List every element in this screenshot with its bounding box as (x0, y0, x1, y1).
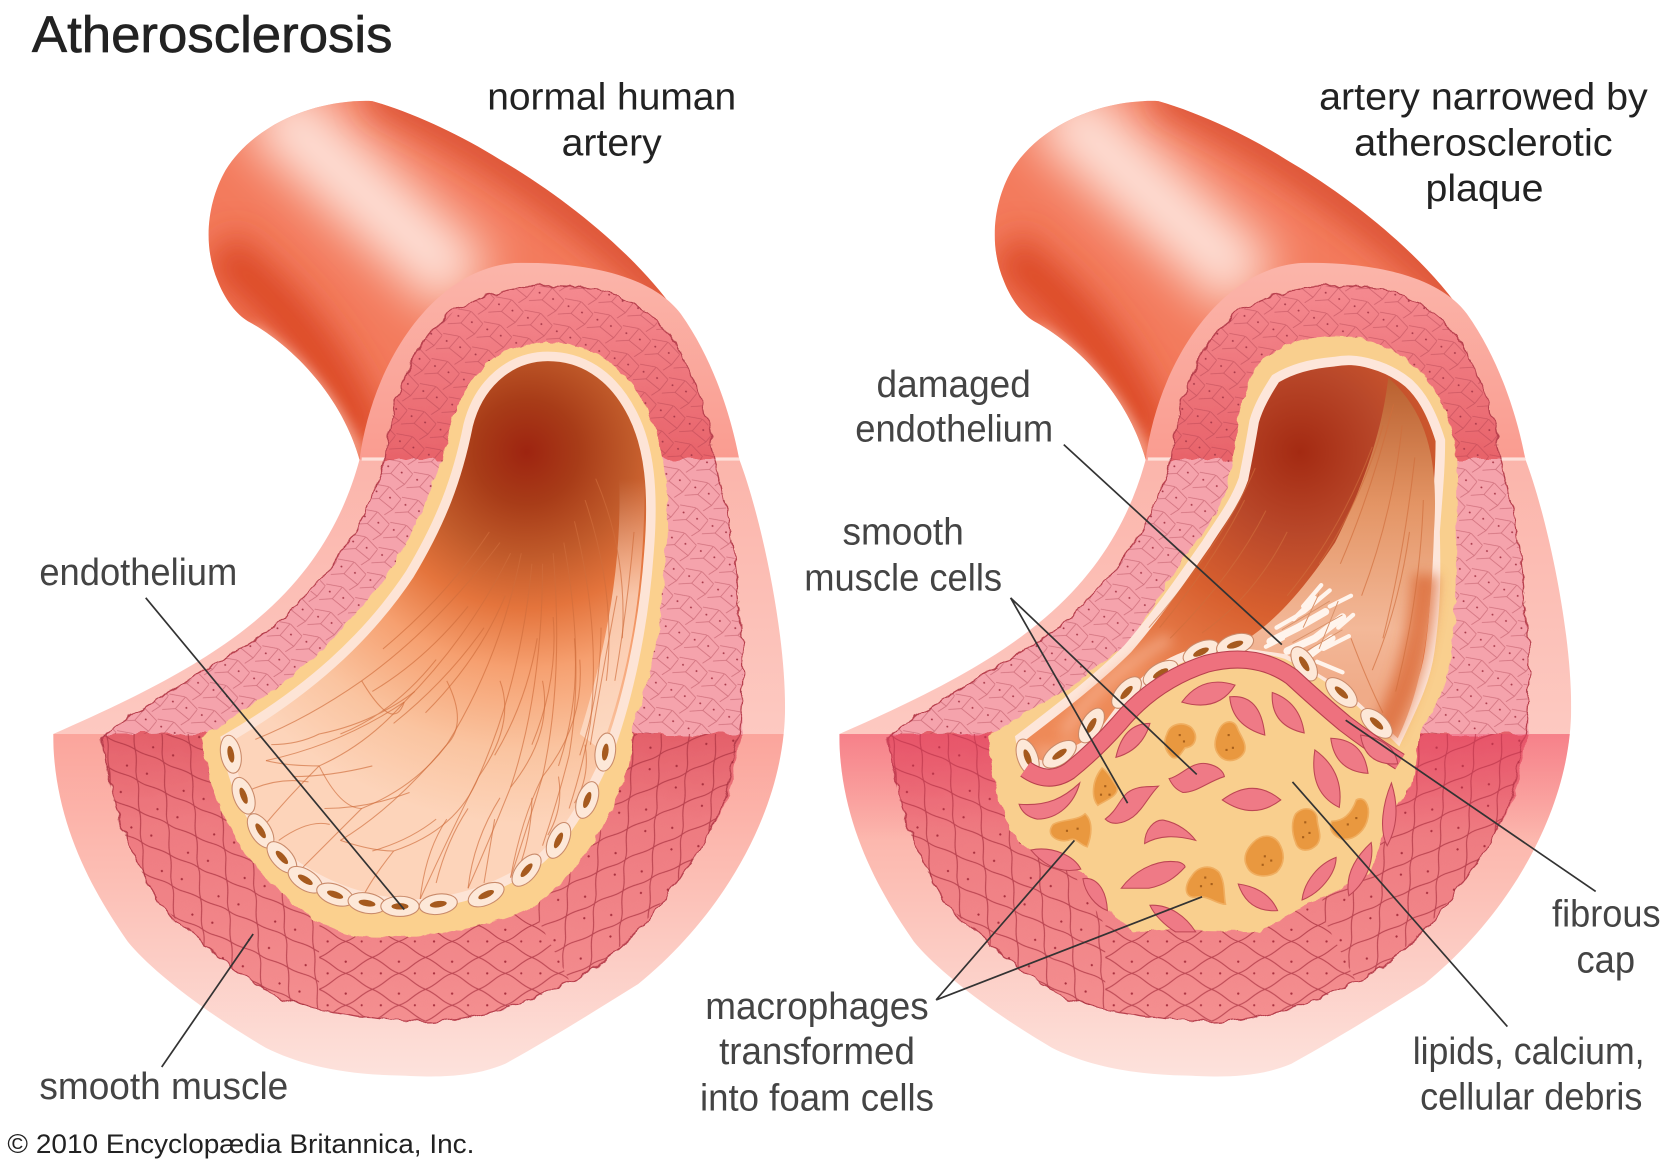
label: smooth muscle (39, 934, 288, 1108)
label: macrophages transformed into foam cells: transformed (719, 1030, 915, 1073)
label: fibrous cap: cap (1577, 938, 1635, 981)
endothelial cells (1012, 629, 1398, 779)
endothelium cells (218, 732, 618, 917)
label: macrophages transformed into foam cells (700, 840, 1202, 1120)
label: damaged endothelium: damaged (877, 363, 1031, 406)
label: damaged endothelium: endothelium (855, 407, 1053, 450)
label: macrophages transformed into foam cells: macrophages (705, 985, 929, 1028)
fibrous cap (1025, 660, 1400, 778)
label: artery narrowed by atherosclerotic plaque: artery narrowed by (1319, 76, 1649, 119)
label: smooth muscle cells (804, 511, 1197, 803)
artery tube and wall (43, 85, 798, 1085)
label: lipids, calcium, cellular debris: cellular debris (1420, 1076, 1642, 1119)
label: normal human artery: normal human (487, 76, 736, 119)
label: macrophages transformed into foam cells: into foam cells (700, 1077, 934, 1120)
panel: normal human artery (43, 85, 798, 1085)
label: artery narrowed by atherosclerotic plaque: atherosclerotic (1354, 121, 1613, 164)
artery tube and wall (829, 85, 1584, 1085)
label: smooth muscle: smooth muscle (39, 1065, 288, 1108)
damaged endothelium patch (1266, 585, 1353, 672)
title: Atherosclerosis (32, 6, 393, 63)
label: smooth muscle cells: muscle cells (804, 556, 1002, 599)
label: endothelium (39, 551, 404, 910)
label: smooth muscle cells: smooth (843, 511, 964, 554)
label: artery narrowed by atherosclerotic plaque (1319, 76, 1649, 210)
cream intima layer (202, 343, 668, 937)
label: normal human artery (487, 76, 736, 164)
label: fibrous cap: fibrous (1552, 893, 1661, 936)
label: lipids, calcium, cellular debris: lipids, calcium, (1413, 1030, 1645, 1073)
smooth muscle cells (1019, 682, 1398, 932)
lumen interior (218, 356, 651, 917)
copyright: © 2010 Encyclopædia Britannica, Inc. (7, 1129, 474, 1159)
label: fibrous cap (1346, 720, 1661, 981)
fold lines (245, 479, 634, 899)
label: artery narrowed by atherosclerotic plaque: plaque (1425, 167, 1544, 210)
plaque and cream layer (988, 336, 1457, 932)
label: lipids, calcium, cellular debris (1292, 782, 1645, 1119)
saturated wall tint (840, 734, 1570, 820)
fold lines (1149, 404, 1423, 713)
label: endothelium: endothelium (39, 551, 237, 594)
narrowed lumen (1012, 360, 1440, 779)
label: damaged endothelium (855, 363, 1282, 645)
label: normal human artery: artery (562, 121, 663, 164)
foam cells (1050, 722, 1368, 904)
panel: narrowed artery (829, 85, 1584, 1085)
